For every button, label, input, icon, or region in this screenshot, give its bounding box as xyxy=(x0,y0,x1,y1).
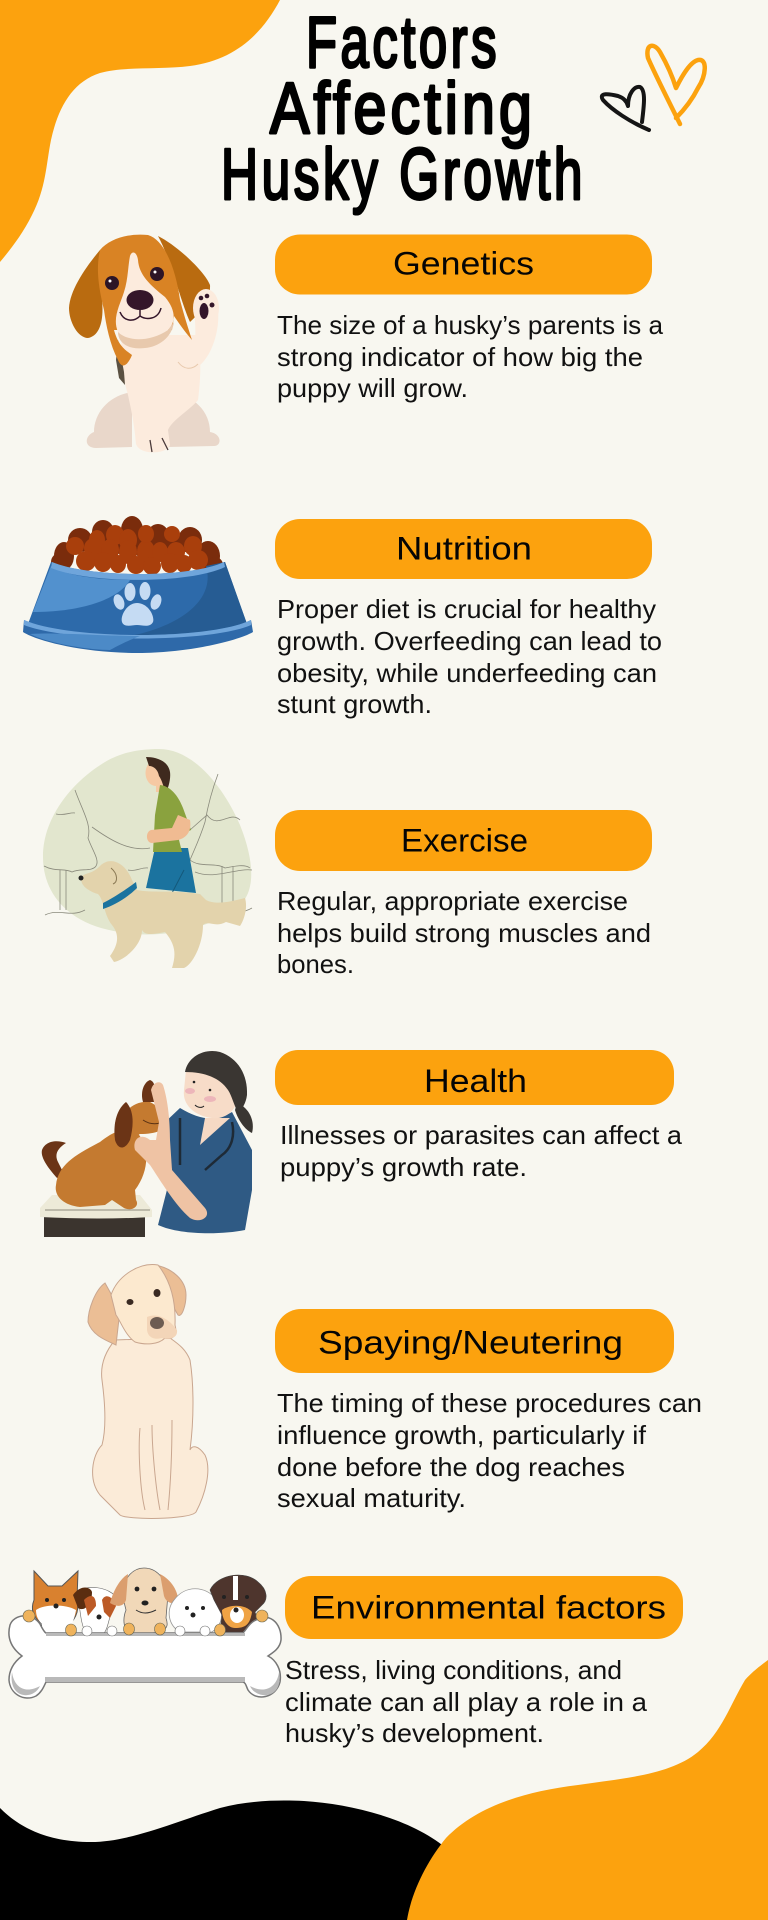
panel: nutrition xyxy=(23,516,662,719)
illustration: man walking a golden dog in park xyxy=(43,749,252,968)
heading pill: Health: Health xyxy=(424,1063,527,1099)
text: exercise description: bones. xyxy=(277,949,354,979)
dog: labrador xyxy=(110,1568,178,1634)
panel: genetics xyxy=(69,234,664,452)
text: environmental factors description: husky’s development. xyxy=(285,1718,544,1748)
text: nutrition description: obesity, while underfeeding can xyxy=(277,658,657,688)
text: nutrition description xyxy=(277,594,662,719)
illustration: five dogs behind a white bone sign xyxy=(9,1568,281,1698)
dog: shiba xyxy=(32,1571,78,1636)
icon: two hearts xyxy=(602,46,705,130)
text: spaying and neutering description: sexual maturity. xyxy=(277,1483,466,1513)
text: nutrition description: Proper diet is crucial for healthy xyxy=(277,594,656,624)
decorative orange blob: bottom right xyxy=(407,1660,768,1920)
text: exercise description xyxy=(277,886,651,979)
text: spaying and neutering description: done before the dog reaches xyxy=(277,1452,625,1482)
panel: spaying and neutering xyxy=(88,1265,702,1518)
illustration: sitting cream labrador xyxy=(88,1265,208,1518)
decorative black wave: bottom left xyxy=(0,1801,446,1920)
heading pill: Environmental factors xyxy=(285,1576,683,1639)
dog: jack russell xyxy=(73,1587,118,1636)
panel: health xyxy=(40,1050,683,1237)
text: health description xyxy=(280,1120,683,1182)
text: genetics description xyxy=(277,310,664,403)
paws xyxy=(23,1610,268,1636)
text: environmental factors description: Stress, living conditions, and xyxy=(285,1655,622,1685)
heading pill: Nutrition xyxy=(275,519,652,579)
dog: bernese xyxy=(210,1575,266,1632)
illustration: vet examining a brown dog on a table xyxy=(40,1051,253,1237)
text: environmental factors description: climate can all play a role in a xyxy=(285,1687,648,1717)
text: genetics description: The size of a husky’s parents is a xyxy=(277,310,664,340)
heading pill: Exercise xyxy=(275,810,652,871)
text: spaying and neutering description: The timing of these procedures can xyxy=(277,1388,702,1418)
title: Affecting xyxy=(270,69,536,149)
text: genetics description: strong indicator of how big the xyxy=(277,342,643,372)
bone sign xyxy=(9,1616,281,1698)
heading pill: Spaying/Neutering: Spaying/Neutering xyxy=(318,1324,623,1360)
heading pill: Exercise: Exercise xyxy=(401,822,528,858)
heading pill: Environmental factors: Environmental factors xyxy=(311,1590,666,1626)
text: health description: Illnesses or parasites can affect a xyxy=(280,1120,683,1150)
text: spaying and neutering description: influence growth, particularly if xyxy=(277,1420,647,1450)
heading pill: Genetics: Genetics xyxy=(393,246,534,282)
text: genetics description: puppy will grow. xyxy=(277,373,468,403)
heading pill: Genetics xyxy=(275,234,652,294)
heading pill: Health xyxy=(275,1050,674,1105)
decorative orange blob: top left xyxy=(0,0,280,262)
heading pill: Spaying/Neutering xyxy=(275,1309,674,1373)
title xyxy=(221,3,586,215)
dog: white fluffy xyxy=(169,1589,222,1632)
heading pill: Nutrition: Nutrition xyxy=(396,530,532,566)
title: Husky Growth xyxy=(221,135,586,215)
text: nutrition description: growth. Overfeeding can lead to xyxy=(277,626,662,656)
text: environmental factors description xyxy=(285,1655,648,1748)
text: exercise description: helps build strong muscles and xyxy=(277,918,651,948)
illustration: waving beagle puppy xyxy=(69,235,220,452)
panel: exercise xyxy=(43,749,652,979)
title: Factors xyxy=(306,3,500,83)
panel: environmental factors xyxy=(9,1568,683,1748)
illustration: blue dog food bowl with paw xyxy=(23,516,253,653)
text: exercise description: Regular, appropriate exercise xyxy=(277,886,628,916)
text: spaying and neutering description xyxy=(277,1388,702,1513)
text: health description: puppy’s growth rate. xyxy=(280,1152,527,1182)
text: nutrition description: stunt growth. xyxy=(277,689,432,719)
